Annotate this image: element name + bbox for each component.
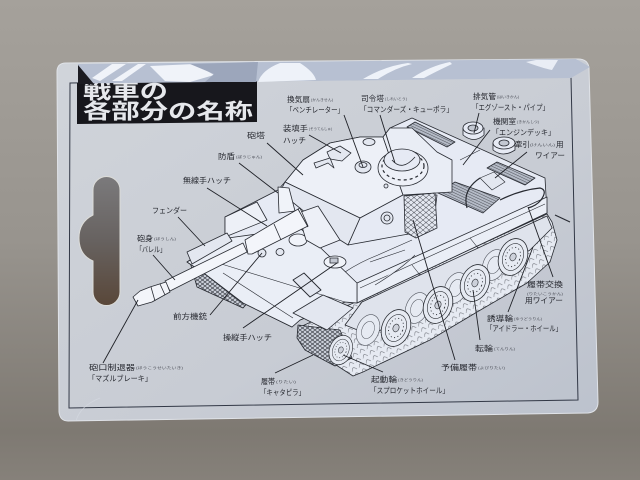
label: track: (りたい) [276, 379, 296, 384]
label: sprocket: 「スプロケットホイール」 [370, 386, 449, 395]
label: commander's cupola: 司令塔 [361, 93, 384, 103]
title: 各部分の名称 [83, 100, 253, 124]
label: fender: フェンダー [152, 205, 187, 215]
sprocket wheel [325, 332, 357, 368]
hull silhouette [187, 118, 547, 327]
label: track [260, 376, 305, 397]
label: sprocket: 起動輪 [371, 374, 397, 384]
label: muzzle brake: (ほうこうせいたいき) [136, 365, 183, 370]
label: towing wire: 牽引 [515, 139, 530, 149]
label: barrel: (ほうしん) [154, 236, 176, 241]
label: spare track [441, 362, 505, 372]
label: barrel: 「バレル」 [136, 245, 166, 254]
label: ventilator: (かんきせん) [311, 97, 333, 102]
commander's cupola [378, 149, 428, 186]
labels [88, 91, 565, 397]
label: towing wire: 用 [556, 140, 564, 149]
label: exhaust pipe: (はいきかん) [497, 94, 519, 99]
label: sprocket [370, 374, 449, 395]
label: towing wire [515, 139, 565, 160]
tank illustration [133, 118, 570, 376]
label: ventilator [286, 94, 344, 114]
label: engine deck: 機関室 [493, 116, 516, 126]
label: barrel: 砲身 [137, 233, 153, 243]
label: idler: 「アイドラー・ホイール」 [486, 324, 562, 333]
label: road wheel: 転輪 [475, 343, 493, 353]
road wheels [352, 234, 533, 351]
label: idler: 誘導輪 [487, 313, 513, 323]
hanging hole [79, 176, 120, 306]
label: loader hatch: ハッチ [283, 136, 306, 145]
label: muzzle brake: 「マズルブレーキ」 [88, 373, 152, 383]
label: idler: (ゆうどうりん) [514, 316, 542, 321]
turret hatches and ventilator [314, 138, 388, 188]
label: engine deck: 「エンジンデッキ」 [492, 127, 555, 137]
label: barrel [136, 233, 176, 254]
plastic reflection [78, 59, 590, 84]
turret bustle [383, 128, 452, 195]
hull side band [357, 197, 547, 303]
label: ventilator: 換気扇 [287, 94, 310, 104]
card [57, 59, 598, 421]
hull front plate [225, 202, 267, 237]
label: exhaust pipe: 「エグゾースト・パイプ」 [472, 102, 549, 112]
label: exhaust pipe [472, 91, 549, 112]
label: mantlet [218, 151, 262, 161]
label: radio operator hatch: 無線手ハッチ [183, 175, 231, 185]
label: sprocket: (きどうりん) [398, 377, 423, 382]
hull front hatches [258, 234, 353, 330]
label: road wheel: (てんりん) [494, 346, 515, 351]
label: track: 履帯 [261, 376, 275, 386]
label: muzzle brake [88, 362, 183, 383]
engine grilles [407, 122, 455, 147]
label: turret: 砲塔 [247, 130, 265, 140]
label: loader hatch: 装填手 [283, 123, 308, 133]
label: track replacement wire: (りたいこうかん) [527, 291, 563, 296]
label: engine deck [492, 116, 555, 137]
leader lines [103, 113, 553, 373]
title [77, 80, 257, 124]
exhaust pipes [463, 122, 515, 154]
deck details [345, 150, 505, 285]
label: mantlet: (ぼうじゅん) [236, 154, 262, 159]
front track [190, 262, 252, 308]
label: muzzle brake: 砲口制退器 [89, 362, 135, 372]
label: driver hatch: 操縦手ハッチ [223, 332, 272, 342]
title: 戦車の [83, 80, 168, 104]
label: loader hatch: (そうてんしゅ) [309, 126, 332, 131]
label: commander's cupola: 「コマンダーズ・キューポラ」 [360, 104, 453, 114]
label: spare track: 予備履帯 [441, 362, 477, 372]
label: road wheel [475, 343, 515, 353]
label: commander's cupola [360, 93, 453, 114]
label: engine deck: (きかんしつ) [517, 119, 539, 124]
label: exhaust pipe: 排気管 [473, 91, 496, 101]
label: idler [486, 313, 562, 333]
deck front glacis [187, 228, 357, 327]
turret [285, 137, 403, 218]
label: track replacement wire: 用ワイアー [525, 296, 563, 305]
diagram frame [69, 77, 578, 408]
tow cable [466, 178, 570, 222]
spare tracks on turret [404, 193, 437, 238]
label: towing wire: (けんいん) [530, 142, 555, 147]
label: track replacement wire [525, 279, 563, 305]
fender [187, 233, 232, 264]
label: ventilator: 「ベンチレーター」 [286, 106, 344, 114]
label: towing wire: ワイアー [535, 151, 565, 160]
mantlet and turret front [280, 182, 360, 245]
label: commander's cupola: (しれいとう) [385, 96, 407, 101]
label: track replacement wire: 履帯交換 [527, 279, 563, 289]
muzzle brake [133, 282, 170, 306]
bottom plastic edge [76, 398, 100, 421]
label: loader hatch [283, 123, 332, 145]
label: mantlet: 防盾 [218, 151, 235, 161]
gun barrel [165, 243, 247, 291]
rear track with treads [300, 214, 557, 376]
label: track: 「キャタピラ」 [260, 388, 305, 397]
label: spare track: (よびりたい) [478, 365, 505, 370]
label: front machine gun: 前方機銃 [173, 311, 207, 321]
